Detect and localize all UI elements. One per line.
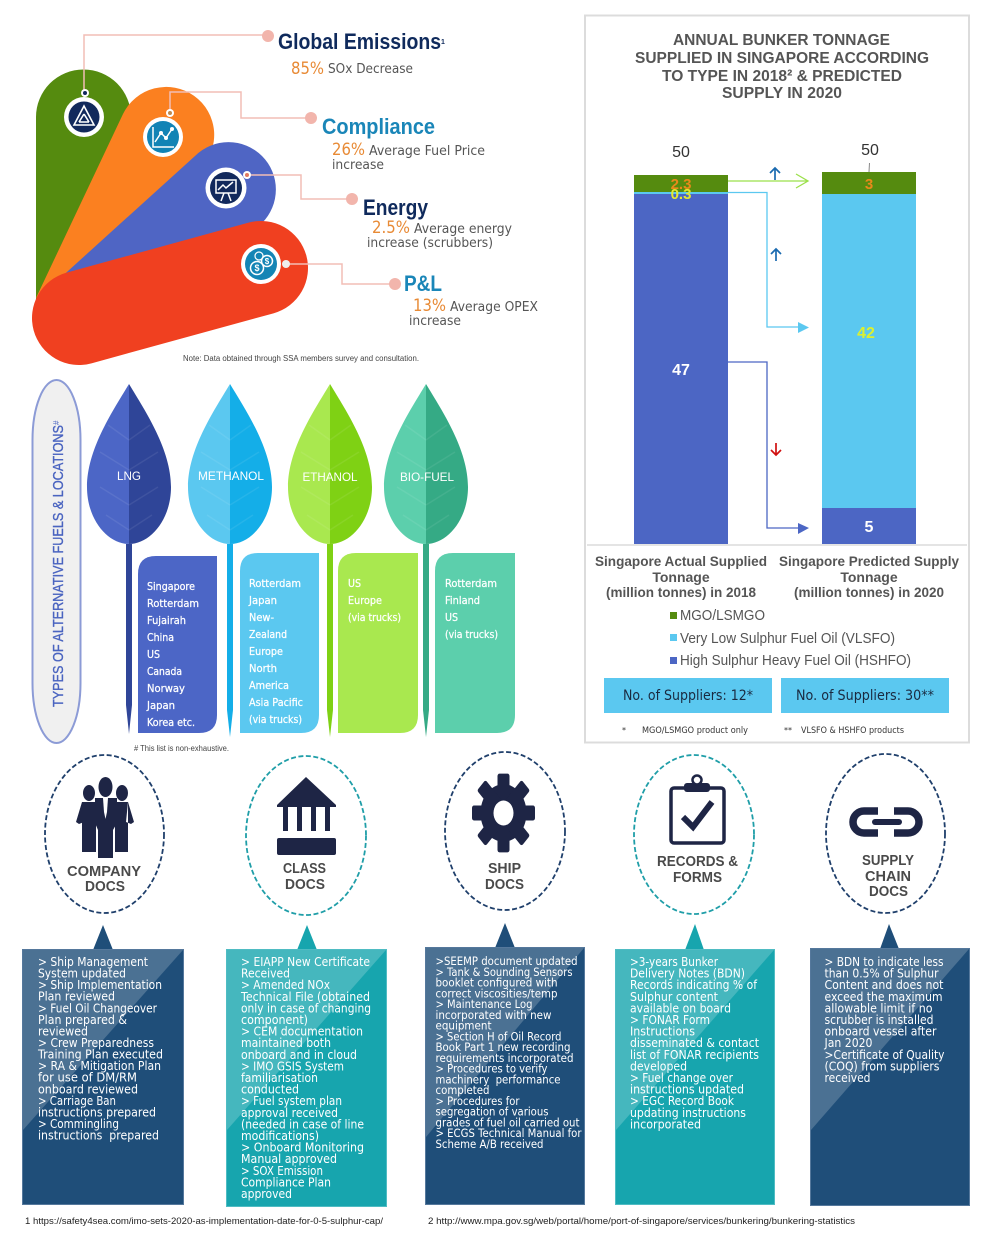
petal: P&L: [79, 268, 261, 318]
panel: company docs list: System updated: [38, 966, 126, 981]
caption: 2020 predicted: (million tonnes) in 2020: [794, 584, 944, 600]
leaf: LNG: LNG: [117, 469, 141, 483]
badge: supply chain docs: DOCS: [869, 884, 908, 900]
arrow: HSHFO flow: [728, 362, 809, 534]
panel: supply chain docs list: received: [824, 1070, 870, 1085]
leaf: LNG: [87, 384, 171, 734]
panel: records and forms list: > EGC Record Book: [630, 1093, 735, 1108]
panel: supply chain docs list: [810, 924, 970, 1206]
panel: company docs list: > RA & Mitigation Plan: [38, 1058, 161, 1073]
panel: class docs list: Manual approved: [241, 1151, 337, 1166]
icon: clipboard: [671, 776, 724, 843]
panel: class docs list: > CEM documentation: [241, 1024, 363, 1039]
panel: bio-fuel locations: Finland: [445, 595, 480, 607]
chart title: ANNUAL BUNKER TONNAGE: [673, 32, 890, 49]
text block: energy: [363, 195, 512, 251]
panel: supply chain docs list: > BDN to indicate less: [824, 954, 944, 969]
text block: energy: 2.5%: [372, 218, 410, 238]
badge: company docs: COMPANY: [67, 864, 141, 880]
bar: 2020 predicted: [822, 142, 916, 544]
icon: people: [76, 777, 134, 858]
panel: class docs list: > Fuel system plan: [241, 1093, 342, 1108]
panel: bio-fuel locations: US: [445, 612, 458, 624]
panel: LNG locations: Japan: [146, 700, 175, 712]
panel: class docs list: modifications): [241, 1128, 319, 1143]
panel: supply chain docs list: >Certificate of Quality: [824, 1047, 945, 1062]
panel: records and forms list: [616, 924, 774, 1204]
panel: ship docs list: requirements incorporated: [436, 1051, 574, 1065]
arrow: up indicators: [770, 168, 781, 261]
panel: class docs list: Received: [241, 966, 290, 981]
panel: ship docs list: completed: [436, 1083, 490, 1097]
legend: MGO/LSMGO: [680, 608, 765, 624]
panel: supply chain docs list: Content and does not: [824, 977, 944, 992]
panel: company docs list: Plan reviewed: [38, 989, 115, 1004]
panel: LNG locations: Fujairah: [147, 615, 186, 627]
panel: ethanol locations: [338, 553, 418, 733]
icon: classical building: [277, 777, 336, 855]
panel: ship docs list: > ECGS Technical Manual for: [436, 1126, 582, 1140]
callout: suppliers 2018: [604, 678, 772, 713]
panel: alternative fuels heading pill: [32, 380, 80, 743]
panel: fan of impact petals: [36, 70, 276, 318]
panel: alternative fuels heading pill: TYPES OF ALTERNATIVE FUELS & LOCATIONS: [50, 425, 67, 707]
panel: supply chain docs list: Jan 2020: [824, 1035, 873, 1050]
panel: ship docs list: [426, 923, 584, 1204]
bar: 2020 predicted: 5: [865, 519, 874, 536]
panel: supply chain docs list: onboard vessel after: [824, 1024, 937, 1039]
icon: gear: [472, 774, 535, 852]
panel: methanol locations: [240, 553, 319, 733]
petal: compliance: [36, 87, 214, 298]
panel: records and forms list: instructions updated: [630, 1082, 744, 1097]
arrow: MGO flow: [728, 174, 808, 188]
text block: compliance: [322, 114, 485, 173]
petal: global emissions: [36, 70, 131, 300]
panel: ethanol locations: (via trucks): [348, 612, 401, 624]
caption: 2020 predicted: Singapore Predicted Supply: [779, 553, 959, 569]
icon: coins: $: [254, 263, 260, 273]
panel: company docs list: [22, 925, 184, 1204]
panel: methanol locations: New-: [249, 612, 274, 624]
text block: compliance: 26%: [332, 140, 365, 160]
legend: [670, 608, 911, 669]
panel: records and forms list: >3-years Bunker: [630, 954, 719, 969]
panel: class docs list: maintained both: [241, 1035, 331, 1050]
panel: records and forms list: developed: [630, 1058, 687, 1073]
badge: class docs: DOCS: [285, 877, 325, 893]
panel: LNG locations: Canada: [147, 666, 182, 678]
panel: supply chain docs list: scrubber is installed: [824, 1012, 934, 1027]
panel: class docs list: Technical File (obtained: [240, 989, 370, 1004]
panel: LNG locations: Korea etc.: [147, 717, 195, 729]
panel: methanol locations: Europe: [249, 646, 283, 658]
panel: ship docs list: > Maintenance Log: [436, 997, 532, 1011]
badge: class docs: CLASS: [283, 861, 326, 877]
panel: methanol locations: Zealand: [249, 629, 287, 641]
panel: class docs list: (needed in case of line: [241, 1116, 364, 1131]
panel: supply chain docs list: (COQ) from suppliers: [824, 1058, 940, 1073]
panel: class docs list: > SOX Emission: [241, 1163, 323, 1178]
footnotes: supplier products: MGO/LSMGO product only: [642, 726, 748, 736]
panel: bunker tonnage chart: [585, 16, 969, 742]
text block: P&L: 13%: [413, 296, 446, 316]
connector lines: [84, 30, 401, 290]
panel: ship docs list: incorporated with new: [436, 1008, 552, 1022]
panel: records and forms list: Delivery Notes (BDN): [630, 966, 745, 981]
panel: alternative fuels heading pill: #: [52, 420, 61, 425]
panel: LNG locations: China: [147, 632, 174, 644]
text block: compliance: increase: [332, 157, 384, 173]
panel: methanol locations: Rotterdam: [249, 578, 301, 590]
text block: compliance: Average Fuel Price: [369, 143, 485, 159]
bar: 2018 actual: 50: [672, 144, 690, 161]
icon: triangle emblem: [64, 89, 104, 137]
panel: ethanol locations: Europe: [348, 595, 382, 607]
footnotes: supplier products: **: [784, 726, 792, 735]
footnotes: supplier products: *: [622, 726, 626, 735]
badge: records and forms: FORMS: [673, 870, 722, 886]
chart title: SUPPLY IN 2020: [722, 85, 842, 102]
panel: class docs list: onboard and in cloud: [241, 1047, 357, 1062]
text block: P&L: increase: [409, 313, 461, 329]
panel: class docs list: Compliance Plan: [241, 1174, 331, 1189]
panel: methanol locations: Asia Pacific: [249, 697, 303, 709]
badge: records and forms: [634, 755, 754, 914]
panel: class docs list: component): [241, 1012, 308, 1027]
chart title: [635, 32, 929, 102]
panel: ship docs list: Book Part 1 new recording: [436, 1040, 570, 1054]
panel: ship docs list: correct viscosities/temp: [436, 986, 558, 1000]
panel: supply chain docs list: than 0.5% of Sulphur: [824, 966, 939, 981]
panel: LNG locations: [138, 556, 217, 733]
panel: ship docs list: > Tank & Sounding Sensors: [436, 965, 572, 979]
bar: 2020 predicted: 50: [861, 142, 879, 159]
panel: records and forms list: Sulphur content: [630, 989, 718, 1004]
badge: company docs: [45, 755, 164, 913]
text block: global emissions: SOx Decrease: [328, 61, 413, 77]
panel: bio-fuel locations: (via trucks): [445, 629, 498, 641]
callout: suppliers 2020: [781, 678, 949, 713]
leaf: bio-fuel: [384, 384, 468, 737]
panel: methanol locations: Japan: [248, 595, 277, 607]
panel: ship docs list: >SEEMP document updated: [436, 954, 578, 968]
icon: scatter chart: [143, 109, 183, 157]
badge: ship docs: [445, 752, 565, 910]
panel: supply chain docs list: exceed the maximum: [824, 989, 942, 1004]
panel: ship docs list: > Procedures for: [436, 1094, 520, 1108]
icon: coins: [241, 244, 290, 284]
panel: class docs list: approval received: [241, 1105, 338, 1120]
callout: suppliers 2018: No. of Suppliers: 12*: [623, 688, 753, 704]
panel: class docs list: only in case of changing: [241, 1000, 371, 1015]
bar: 2018 actual: 47: [672, 362, 690, 379]
panel: company docs list: > Crew Preparedness: [38, 1035, 154, 1050]
badge: records and forms: RECORDS &: [657, 854, 738, 870]
legend: High Sulphur Heavy Fuel Oil (HSHFO): [680, 653, 911, 669]
panel: company docs list: > Carriage Ban: [38, 1093, 116, 1108]
leaf: ethanol: ETHANOL: [302, 470, 358, 484]
callout: suppliers 2020: No. of Suppliers: 30**: [796, 688, 934, 704]
arrow: down indicator: [771, 443, 781, 455]
panel: LNG locations: Norway: [147, 683, 185, 695]
panel: ship docs list: grades of fuel oil carried out: [436, 1115, 580, 1129]
panel: class docs list: > IMO GSIS System: [241, 1058, 344, 1073]
caption: 2018 actual: Tonnage: [652, 569, 710, 585]
panel: bio-fuel locations: [435, 553, 515, 733]
badge: ship docs: DOCS: [485, 877, 524, 893]
panel: ship docs list: equipment: [436, 1018, 492, 1032]
panel: ship docs list: > Section H of Oil Record: [436, 1029, 562, 1043]
bar: 2018 actual: 2.3: [671, 176, 691, 193]
panel: ethanol locations: US: [348, 578, 361, 590]
text block: P&L: Average OPEX: [450, 299, 538, 315]
icon: presentation board: [206, 168, 251, 208]
leaf: bio-fuel: BIO-FUEL: [400, 470, 454, 484]
panel: ship docs list: segregation of various: [436, 1104, 548, 1118]
panel: company docs list: onboard reviewed: [38, 1081, 138, 1096]
panel: company docs list: reviewed: [38, 1024, 88, 1038]
panel: records and forms list: incorporated: [630, 1116, 701, 1131]
panel: methanol locations: North: [249, 663, 277, 675]
panel: company docs list: Plan prepared &: [38, 1012, 127, 1027]
panel: company docs list: instructions prepared: [38, 1104, 156, 1119]
badge: company docs: DOCS: [85, 879, 125, 895]
panel: company docs list: > Fuel Oil Changeover: [38, 1000, 158, 1015]
panel: class docs list: familiarisation: [241, 1070, 318, 1085]
leaf: ethanol: [288, 384, 372, 737]
bar: 2018 actual: [634, 144, 728, 544]
bar: 2020 predicted: 42: [857, 325, 875, 342]
badge: class docs: [246, 756, 366, 915]
panel: LNG locations: US: [147, 649, 160, 661]
panel: ship docs list: booklet configured with: [436, 976, 558, 990]
caption: 2018 actual: Singapore Actual Supplied: [595, 553, 767, 569]
caption: 2018 actual: [595, 553, 767, 600]
panel: company docs list: > Commingling: [38, 1116, 119, 1131]
panel: class docs list: approved: [241, 1186, 292, 1201]
icon: chain link: [853, 811, 919, 833]
text block: global emissions: [278, 29, 445, 79]
panel: class docs list: > EIAPP New Certificate: [241, 954, 370, 969]
panel: company docs list: Training Plan executed: [37, 1047, 163, 1062]
bar: 2020 predicted: 3: [865, 176, 873, 193]
footnotes: supplier products: VLSFO & HSHFO products: [801, 726, 905, 736]
text block: energy: increase (scrubbers): [367, 235, 493, 251]
arrow: VLSFO flow: [728, 192, 809, 333]
panel: class docs list: > Amended NOx: [241, 977, 330, 992]
footnotes: supplier products: [622, 726, 905, 736]
panel: company docs list: for use of DM/RM: [38, 1070, 137, 1085]
petal: energy: [36, 142, 276, 300]
bar: 2018 actual: 0.3: [671, 186, 691, 203]
reference 2: 2 http://www.mpa.gov.sg/web/portal/home/port-of-singapore/services/bunkering/bunkering-statistics: [428, 1216, 855, 1227]
panel: records and forms list: list of FONAR recipients: [630, 1047, 759, 1062]
panel: ship docs list: > Procedures to verify: [436, 1062, 548, 1076]
caption: 2018 actual: (million tonnes) in 2018: [606, 584, 756, 600]
panel: records and forms list: Records indicating % of: [630, 977, 758, 992]
text block: P&L: P&L: [404, 271, 442, 296]
footnote: non-exhaustive: # This list is non-exhaustive.: [134, 744, 229, 753]
caption: 2020 predicted: Tonnage: [840, 569, 898, 585]
text block: P&L: [404, 271, 538, 329]
text block: compliance: Compliance: [322, 114, 435, 139]
leaf: methanol: METHANOL: [198, 469, 264, 483]
panel: methanol locations: America: [249, 680, 289, 692]
leaf: methanol: [188, 384, 272, 737]
text block: global emissions: Global Emissions: [278, 29, 441, 54]
panel: ship docs list: Scheme A/B received: [436, 1137, 544, 1151]
panel: records and forms list: disseminated & contact: [630, 1035, 759, 1050]
panel: company docs list: instructions prepared: [38, 1128, 159, 1142]
panel: records and forms list: updating instructions: [630, 1105, 746, 1120]
badge: supply chain docs: [826, 754, 945, 913]
chart title: SUPPLIED IN SINGAPORE ACCORDING: [635, 50, 929, 67]
text block: global emissions: 85%: [291, 59, 324, 79]
panel: bio-fuel locations: Rotterdam: [445, 578, 497, 590]
panel: LNG locations: Rotterdam: [147, 598, 199, 610]
panel: supply chain docs list: allowable limit if no: [824, 1000, 932, 1015]
panel: records and forms list: Instructions: [630, 1024, 695, 1039]
badge: ship docs: SHIP: [488, 861, 521, 877]
panel: methanol locations: (via trucks): [249, 714, 302, 726]
text block: global emissions: 1: [441, 39, 445, 46]
panel: class docs list: [226, 925, 386, 1206]
badge: supply chain docs: SUPPLY: [862, 853, 914, 869]
chart title: TO TYPE IN 2018² & PREDICTED: [662, 68, 902, 85]
panel: LNG locations: Singapore: [147, 581, 195, 593]
reference 1: 1 https://safety4sea.com/imo-sets-2020-as-implementation-date-for-0-5-sulphur-cap/: [25, 1216, 383, 1227]
text block: energy: Energy: [363, 195, 429, 220]
panel: ship docs list: machinery performance: [436, 1072, 560, 1086]
panel: records and forms list: available on board: [630, 1000, 731, 1015]
caption: 2020 predicted: [779, 553, 959, 600]
badge: supply chain docs: CHAIN: [865, 869, 911, 885]
panel: company docs list: > Ship Management: [38, 954, 148, 969]
note: data source: Note: Data obtained through SSA members survey and consultation.: [183, 354, 419, 363]
legend: Very Low Sulphur Fuel Oil (VLSFO): [680, 631, 895, 647]
text block: energy: Average energy: [414, 221, 512, 237]
panel: records and forms list: > Fuel change over: [630, 1070, 734, 1085]
panel: class docs list: conducted: [241, 1082, 299, 1097]
icon: coins: $: [265, 257, 270, 266]
panel: class docs list: > Onboard Monitoring: [241, 1140, 364, 1155]
panel: records and forms list: > FONAR Form: [630, 1012, 710, 1027]
panel: company docs list: > Ship Implementation: [38, 977, 162, 992]
